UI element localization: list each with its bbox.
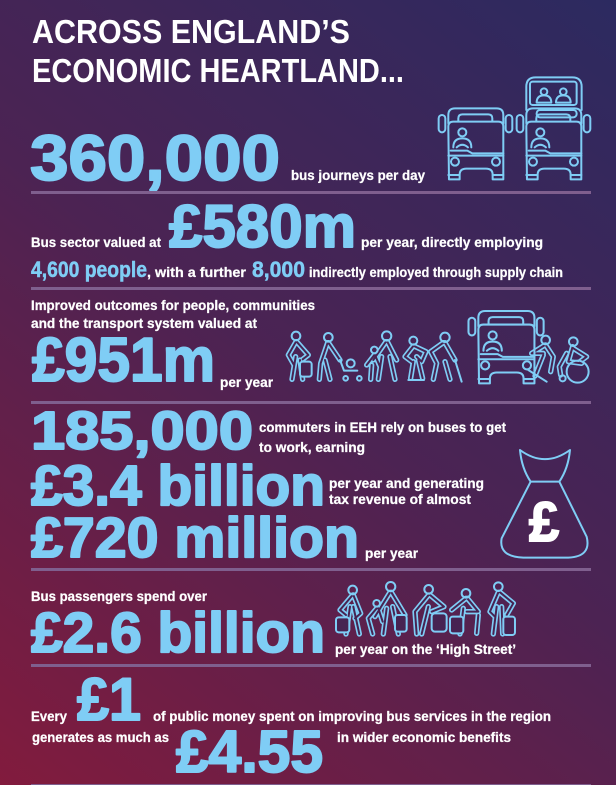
stat: bus sector value: 4,600 people bbox=[31, 257, 147, 282]
stat: commuters: per year bbox=[365, 545, 419, 561]
stat: commuters: £720 million bbox=[31, 506, 359, 570]
stat: economic return bbox=[31, 666, 551, 785]
stat: bus journeys: 360,000 bbox=[30, 122, 280, 194]
stat: economic return: of public money spent on improving bus services in the region bbox=[153, 708, 551, 724]
stat: economic return: £1 bbox=[77, 666, 141, 733]
icon: money bag bbox=[501, 450, 588, 558]
stat: bus sector value bbox=[31, 193, 563, 282]
stat: improved outcomes: per year bbox=[220, 374, 274, 390]
stat: bus sector value: Bus sector valued at bbox=[31, 234, 161, 250]
stat: improved outcomes bbox=[31, 297, 315, 395]
stat: economic return: £4.55 bbox=[176, 719, 323, 785]
stat: commuters: £3.4 billion bbox=[31, 454, 325, 518]
stat: commuters: to work, earning bbox=[259, 439, 365, 455]
divider bbox=[31, 568, 591, 571]
stat: bus journeys bbox=[30, 122, 425, 194]
title: ECONOMIC HEARTLAND... bbox=[32, 52, 404, 89]
stat: high street: £2.6 billion bbox=[31, 601, 325, 665]
stat: improved outcomes: £951m bbox=[32, 326, 215, 395]
divider bbox=[31, 784, 591, 785]
stat: bus journeys: bus journeys per day bbox=[291, 167, 425, 183]
icon: double decker bus bbox=[517, 77, 590, 179]
stat: commuters: per year and generating bbox=[329, 475, 484, 491]
stat: bus sector value: 8,000 bbox=[252, 257, 305, 282]
stat: economic return: generates as much as bbox=[32, 729, 169, 745]
divider bbox=[31, 664, 591, 667]
icon: single deck bus bbox=[439, 108, 512, 179]
stat: commuters: 185,000 bbox=[31, 401, 253, 461]
divider bbox=[31, 287, 591, 290]
stat: commuters: tax revenue of almost bbox=[329, 491, 471, 507]
stat: bus sector value: , with a further bbox=[147, 264, 247, 280]
stat: economic return: Every bbox=[31, 708, 67, 724]
stat: improved outcomes: and the transport system valued at bbox=[31, 315, 257, 331]
icon: shoppers bbox=[336, 582, 515, 635]
divider bbox=[31, 401, 591, 404]
stat: high street: Bus passengers spend over bbox=[31, 588, 208, 604]
title bbox=[32, 13, 404, 89]
stat: high street bbox=[31, 588, 516, 665]
icon: group of passengers bbox=[288, 331, 587, 382]
stat: economic return: in wider economic benefits bbox=[337, 729, 511, 745]
stat: bus sector value: per year, directly employing bbox=[361, 234, 543, 250]
icon: money bag: £ bbox=[529, 490, 559, 553]
icon: accessible bus bbox=[468, 311, 589, 383]
title: ACROSS ENGLAND’S bbox=[32, 13, 350, 50]
stat: bus sector value: indirectly employed through supply chain bbox=[309, 264, 563, 280]
stat: high street: per year on the ‘High Street’ bbox=[335, 641, 516, 657]
stat: bus sector value: £580m bbox=[169, 193, 356, 260]
divider bbox=[31, 191, 591, 194]
stat: commuters: commuters in EEH rely on buses to get bbox=[259, 419, 506, 435]
stat: improved outcomes: Improved outcomes for people, communities bbox=[31, 297, 315, 313]
stat: commuters bbox=[31, 401, 506, 570]
